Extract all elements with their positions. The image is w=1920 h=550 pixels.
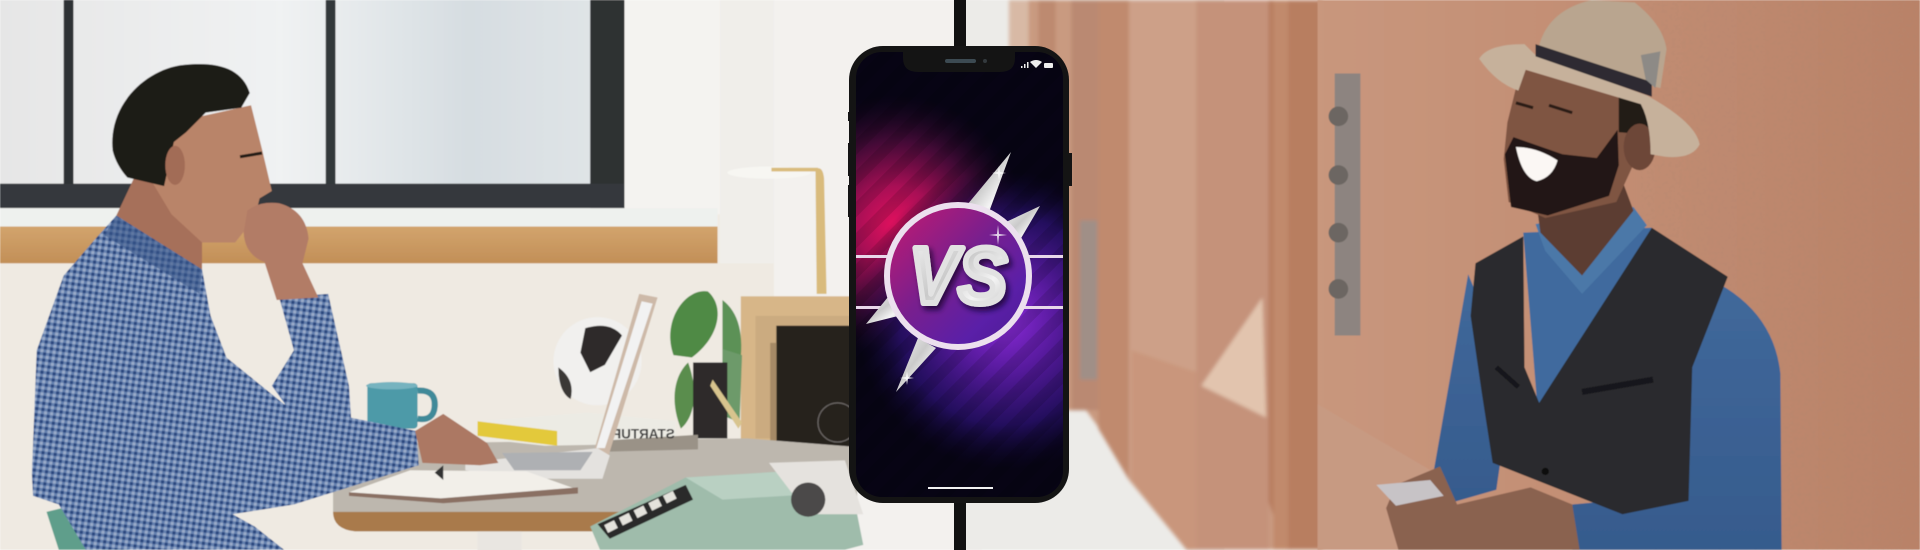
diagonal stripes — [856, 142, 1063, 434]
notch — [903, 46, 1015, 72]
VS lettering: VS — [909, 231, 1007, 320]
right photo: man with hat — [955, 0, 1920, 550]
wall seam — [1318, 404, 1433, 550]
man: face — [1504, 70, 1647, 218]
office wall — [0, 0, 982, 550]
man: hands — [1386, 467, 1580, 550]
man: smile — [1516, 147, 1558, 181]
man: eyes — [1516, 103, 1572, 113]
pink glow — [856, 108, 1001, 338]
man: typing hand — [415, 414, 498, 465]
man: hand on chin — [244, 203, 318, 300]
man: denim sleeves and shirt — [1434, 207, 1782, 550]
speaker and camera — [945, 59, 987, 63]
man: shirt and arms — [32, 216, 419, 550]
left photo: man at desk — [0, 0, 982, 550]
typewriter — [590, 460, 863, 550]
man: beard — [1505, 130, 1619, 216]
building columns — [1009, 0, 1322, 550]
man: neck — [1536, 171, 1633, 276]
man: head — [112, 64, 272, 242]
silver spikes — [866, 152, 1040, 392]
phone body — [849, 46, 1069, 503]
notebook and pen — [349, 465, 578, 503]
man: hat — [1479, 0, 1700, 157]
mug — [366, 382, 435, 429]
horizontal rails — [856, 255, 1063, 309]
plant — [670, 291, 742, 438]
smartphone — [848, 46, 1072, 503]
laptop — [465, 294, 658, 479]
man: smartphone — [1376, 480, 1444, 506]
window sill — [0, 208, 718, 263]
phone side buttons — [848, 112, 1072, 217]
window — [0, 0, 624, 208]
textured wall — [1318, 0, 1920, 550]
screen background — [856, 52, 1063, 497]
chair — [47, 496, 127, 550]
stacked books — [478, 413, 698, 452]
wall grain — [1641, 0, 1920, 550]
man: vest — [1471, 228, 1728, 514]
purple glow — [864, 181, 1063, 460]
alley pavement — [955, 0, 1224, 550]
home indicator — [928, 487, 993, 489]
status bar icons — [1021, 60, 1053, 68]
man: neck — [116, 171, 202, 272]
man: hair and ear — [1619, 88, 1656, 170]
desk — [333, 438, 857, 550]
badge disc — [887, 205, 1029, 347]
metal bracket — [1329, 73, 1360, 336]
phone screen — [856, 52, 1063, 497]
sparkles — [900, 166, 1007, 385]
center divider bar — [954, 0, 966, 550]
desk lamp — [727, 167, 827, 294]
globe — [553, 317, 642, 405]
picture frame on desk — [741, 296, 857, 441]
book spine text: STARTUP — [612, 426, 675, 441]
speaker — [770, 326, 857, 465]
